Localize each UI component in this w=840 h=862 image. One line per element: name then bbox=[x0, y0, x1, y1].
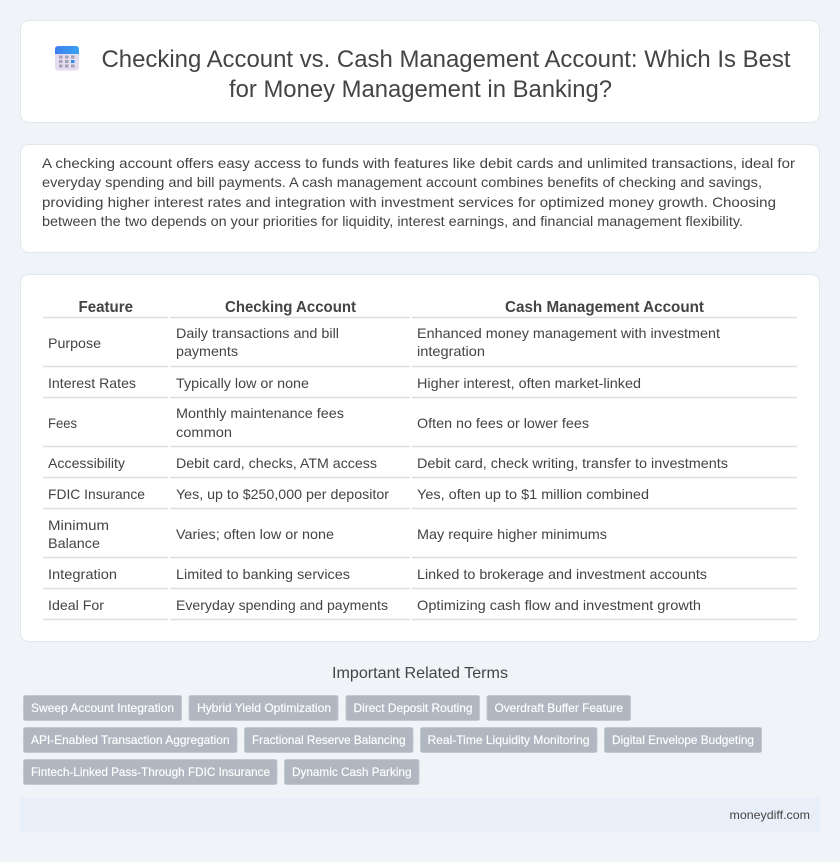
related terms chips: Real-Time Liquidity Monitoring bbox=[428, 733, 590, 747]
row: minimum balance bbox=[48, 517, 607, 551]
row: purpose bbox=[48, 325, 720, 359]
title bbox=[102, 46, 791, 103]
row: fees: Often no fees or lower fees bbox=[417, 415, 589, 431]
panel: header bbox=[20, 20, 820, 122]
table header row: Checking Account bbox=[225, 299, 357, 316]
related terms chips: Direct Deposit Routing bbox=[354, 701, 472, 715]
related terms chips bbox=[24, 696, 762, 784]
row: ideal for bbox=[48, 597, 701, 613]
row: purpose: payments bbox=[176, 343, 238, 359]
row: FDIC insurance: Yes, up to $250,000 per depositor bbox=[176, 486, 389, 502]
title: Checking Account vs. Cash Management Account: Which Is Best bbox=[102, 46, 791, 73]
row: fees: common bbox=[176, 424, 232, 440]
row: integration bbox=[48, 566, 707, 582]
related terms chips: API-Enabled Transaction Aggregation bbox=[31, 733, 230, 747]
panel: introduction text: A checking account offers easy access to funds with features like debit cards and unlimited transactions, ideal for bbox=[42, 155, 795, 171]
icon: calendar bbox=[55, 46, 79, 70]
panel: introduction text bbox=[20, 144, 820, 252]
row: purpose: integration bbox=[417, 343, 485, 359]
row: integration: Integration bbox=[48, 566, 117, 582]
related terms chips: Fintech-Linked Pass-Through FDIC Insurance bbox=[31, 765, 270, 779]
panel: introduction text: everyday spending and bill payments. A cash management account combines benefits of checking and savings, bbox=[42, 174, 762, 190]
row: fees bbox=[48, 405, 589, 440]
row: interest rates: Typically low or none bbox=[176, 375, 309, 391]
row: purpose: Enhanced money management with investment bbox=[417, 325, 720, 341]
footer: moneydiff.com bbox=[730, 808, 810, 822]
row: fees: Fees bbox=[48, 415, 77, 431]
row: purpose: Purpose bbox=[48, 335, 101, 351]
table header row: Cash Management Account bbox=[505, 299, 705, 316]
row: interest rates: Interest Rates bbox=[48, 375, 136, 391]
row: integration: Limited to banking services bbox=[176, 566, 350, 582]
row: interest rates bbox=[48, 375, 641, 391]
row: ideal for: Ideal For bbox=[48, 597, 104, 613]
panel: introduction text: providing higher interest rates and integration with investment services for optimized money growth. Choosing bbox=[42, 194, 776, 210]
row: minimum balance: Minimum bbox=[48, 517, 109, 533]
related terms chips: Fractional Reserve Balancing bbox=[252, 733, 406, 747]
row: accessibility: Debit card, checks, ATM access bbox=[176, 455, 377, 471]
related terms chips: Overdraft Buffer Feature bbox=[494, 701, 623, 715]
row: FDIC insurance: FDIC Insurance bbox=[48, 486, 145, 502]
row: minimum balance: Balance bbox=[48, 535, 100, 551]
footer bbox=[20, 798, 820, 832]
row: accessibility bbox=[48, 455, 728, 471]
row: FDIC insurance: Yes, often up to $1 million combined bbox=[417, 486, 649, 502]
row: FDIC insurance bbox=[48, 486, 649, 502]
row: accessibility: Accessibility bbox=[48, 455, 125, 471]
table header row: Feature bbox=[78, 299, 133, 316]
panel: introduction text: between the two depends on your priorities for liquidity, interest earnings, and financial management flexibility. bbox=[42, 213, 743, 229]
row: minimum balance: Varies; often low or none bbox=[176, 526, 334, 542]
row: interest rates: Higher interest, often market-linked bbox=[417, 375, 641, 391]
related terms chips: Hybrid Yield Optimization bbox=[197, 701, 331, 715]
row: ideal for: Everyday spending and payments bbox=[176, 597, 388, 613]
row: ideal for: Optimizing cash flow and investment growth bbox=[417, 597, 701, 613]
table header row bbox=[78, 299, 705, 316]
related terms chips: Dynamic Cash Parking bbox=[292, 765, 412, 779]
heading: important related terms: Important Related Terms bbox=[332, 665, 508, 682]
panel: comparison table bbox=[20, 274, 820, 642]
row: minimum balance: May require higher minimums bbox=[417, 526, 607, 542]
row: integration: Linked to brokerage and investment accounts bbox=[417, 566, 707, 582]
row: purpose: Daily transactions and bill bbox=[176, 325, 339, 341]
title: for Money Management in Banking? bbox=[229, 76, 612, 103]
row: accessibility: Debit card, check writing, transfer to investments bbox=[417, 455, 728, 471]
related terms chips: Digital Envelope Budgeting bbox=[612, 733, 754, 747]
row: fees: Monthly maintenance fees bbox=[176, 405, 344, 421]
related terms chips: Sweep Account Integration bbox=[31, 701, 174, 715]
